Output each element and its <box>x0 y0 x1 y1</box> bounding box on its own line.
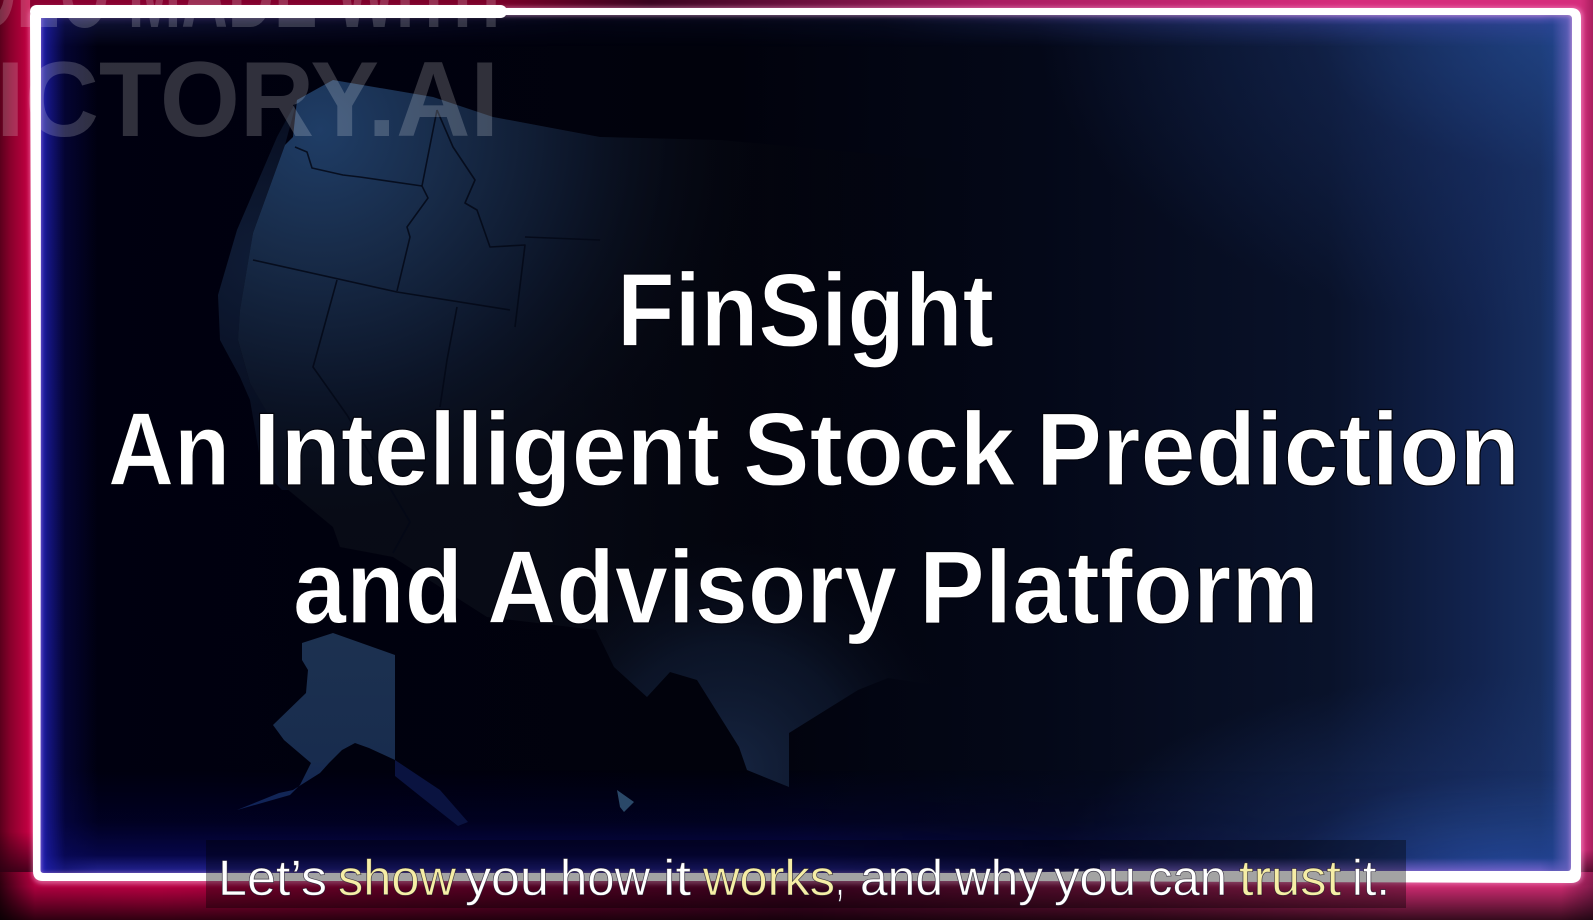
caption text: trust <box>1239 850 1341 906</box>
caption text: how <box>560 850 651 906</box>
caption text: Let’s <box>218 850 327 906</box>
caption text: and <box>860 850 943 906</box>
caption text: it. <box>1352 850 1390 906</box>
screen glow: bottom edge thin purple at right <box>1100 858 1575 872</box>
outer neon strip: top <box>30 0 1580 16</box>
outer neon strip: right <box>1580 0 1593 878</box>
caption text: can <box>1148 850 1227 906</box>
map: coastal shelf band <box>218 100 297 490</box>
caption text: show <box>338 850 457 906</box>
caption text: , <box>836 850 844 906</box>
map: Alaska <box>237 633 468 826</box>
screen glow: bottom edge <box>42 792 1554 873</box>
caption text: why <box>954 850 1043 906</box>
watermark text: ICTORY.AI <box>0 39 499 159</box>
screen glow: top edge <box>46 15 1567 42</box>
caption text: works <box>702 850 835 906</box>
screen glow: left edge <box>38 13 98 874</box>
title line 2: An <box>108 392 230 508</box>
title line 3: Advisory <box>487 530 897 646</box>
title line 3 <box>293 530 1319 646</box>
caption text: you <box>1054 850 1136 906</box>
title line 3: Platform <box>919 530 1319 646</box>
caption box <box>206 840 1406 908</box>
caption text: it <box>663 850 691 906</box>
map: state borders <box>253 110 600 553</box>
screen glow: right edge <box>1540 13 1575 874</box>
title line 2: Prediction <box>1036 392 1520 508</box>
title line 3: and <box>293 530 463 646</box>
map: Hawaii <box>617 790 634 812</box>
map: contiguous states shape <box>238 80 1000 787</box>
title line 1: FinSight <box>617 253 994 369</box>
title line 2: Stock <box>743 392 1015 508</box>
outer neon strip: bottom <box>0 872 1593 920</box>
caption text: you <box>465 850 549 906</box>
outer neon strip: left <box>0 0 36 885</box>
title line 2 <box>108 392 1520 508</box>
title line 2: Intelligent <box>253 392 720 508</box>
